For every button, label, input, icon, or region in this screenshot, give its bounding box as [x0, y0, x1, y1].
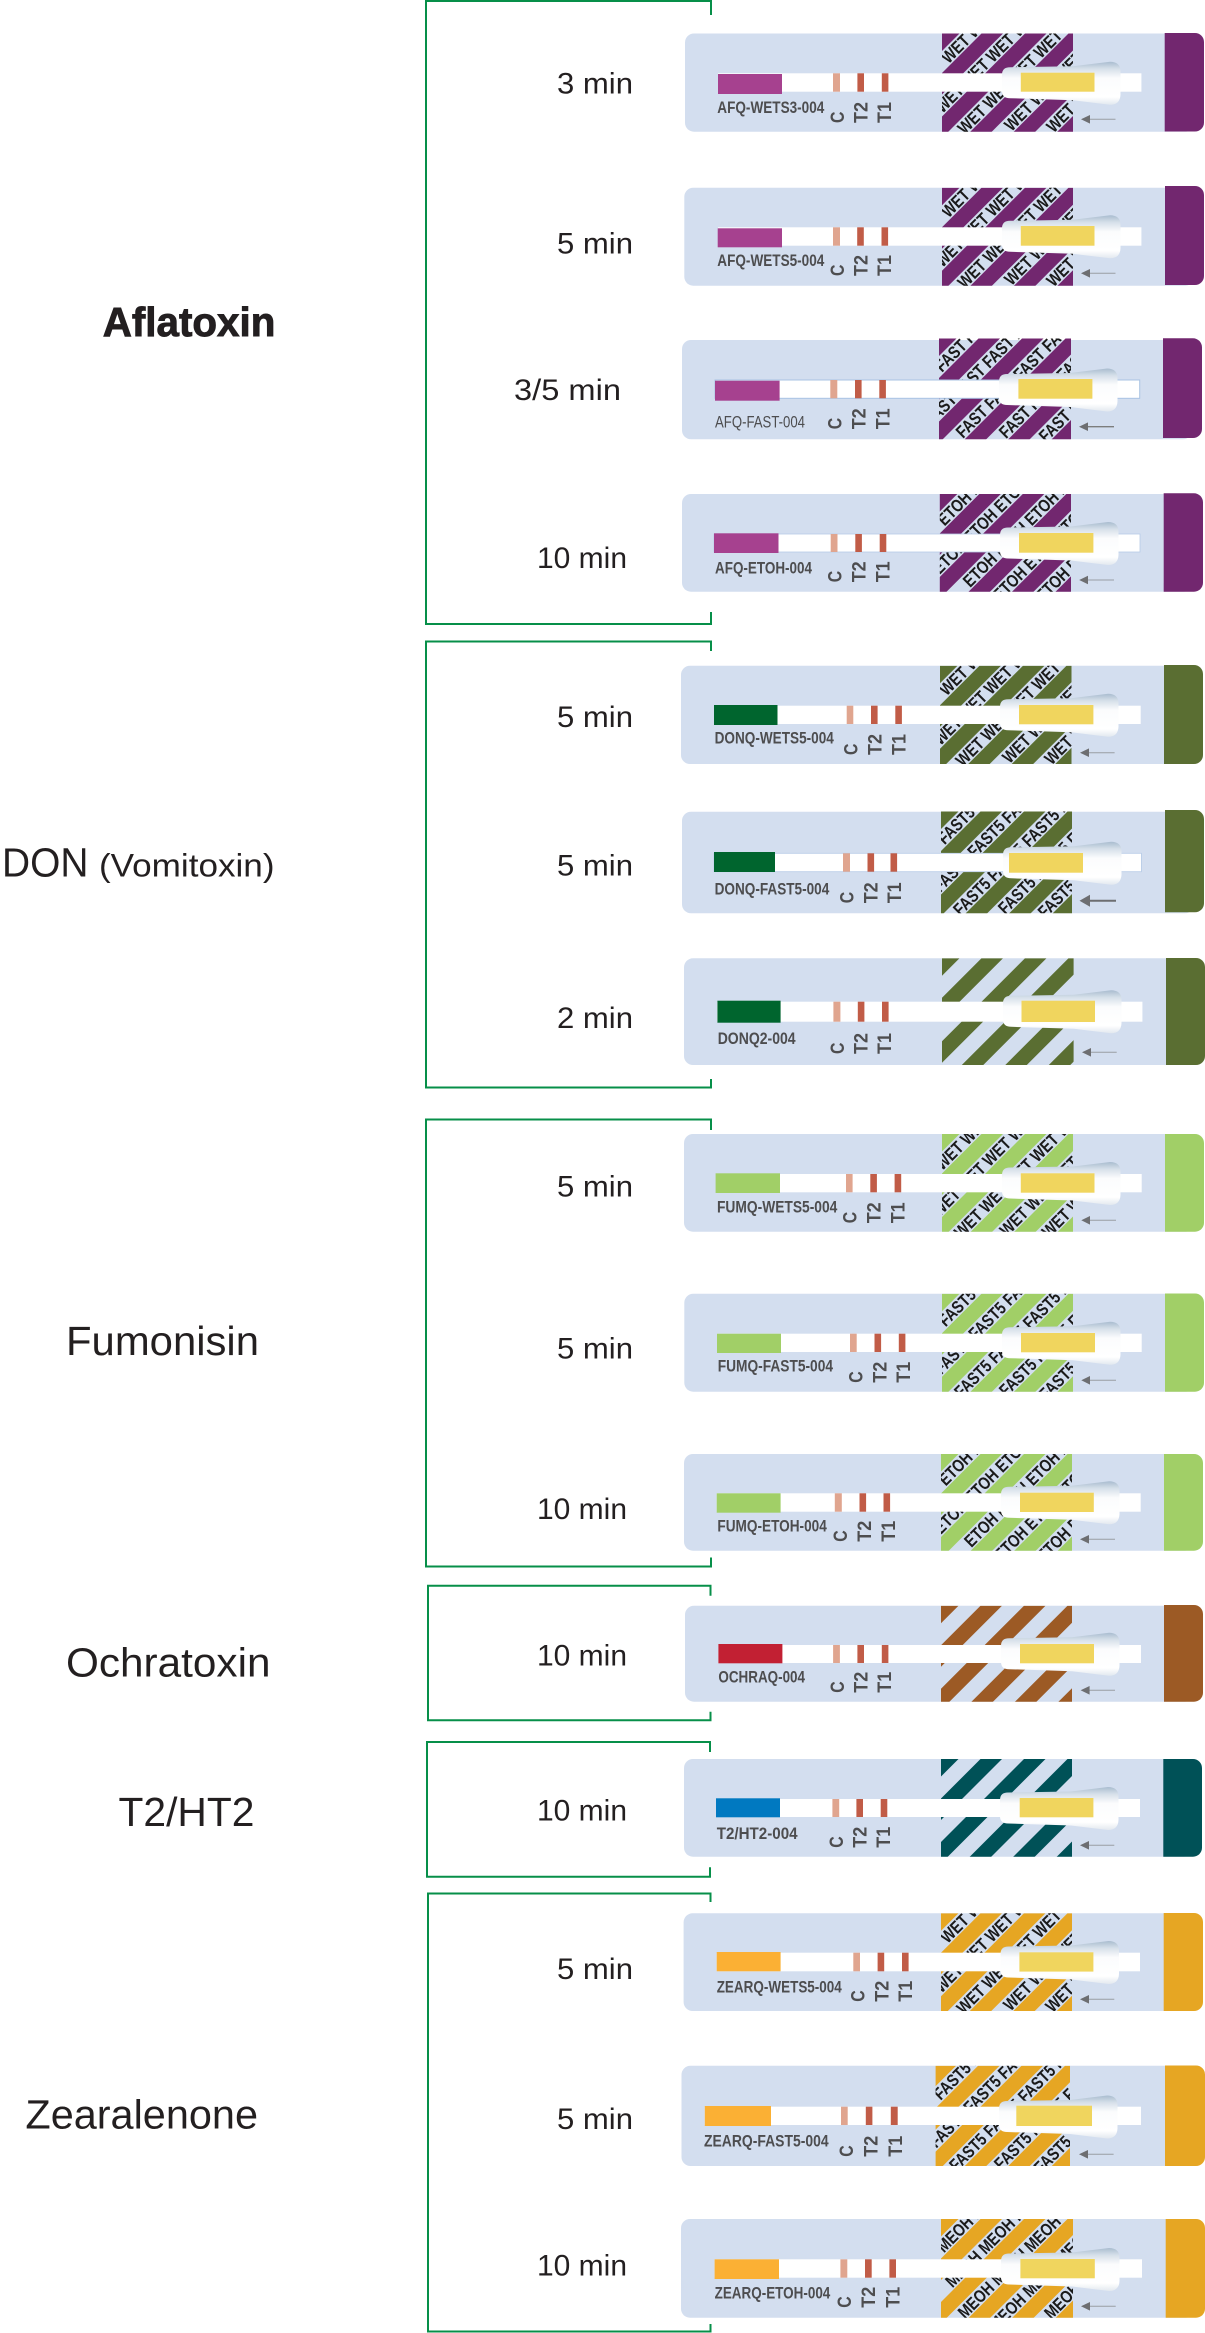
test strip: FUMQ-WETS5-004: C [840, 1212, 862, 1223]
hatch: WET: WET WET [937, 1886, 999, 1947]
product code: ZEARQ-FAST5-004 [704, 2133, 829, 2151]
test strip: FUMQ-ETOH-004 [684, 1374, 1203, 1603]
test strip: T2/HT2-004 [684, 1759, 1202, 1869]
hatch: FAST5: FAST5 FAST5 FAST5 [930, 783, 1044, 896]
time: 5 min: 5 min [557, 2103, 633, 2136]
bracket: DON [426, 642, 711, 1088]
bracket: Ochratoxin [428, 1586, 710, 1720]
hatch: WET: WET WET WET [1001, 203, 1088, 289]
hatch: ETOH: ETOH ETOH ETOH [990, 502, 1093, 605]
applicator [1001, 1633, 1120, 1676]
test strip: ZEARQ-ETOH-004: T2 [858, 2287, 880, 2308]
arrow [1079, 2150, 1114, 2159]
applicator [1000, 522, 1118, 565]
test strip: ZEARQ-WETS5-004: T1 [895, 1981, 917, 2002]
test strip: FUMQ-ETOH-004: T2 [854, 1521, 876, 1542]
hatch: FAST5: FAST5 FAST5 FAST5 [926, 2038, 1040, 2152]
end cap [1165, 2066, 1205, 2166]
test strip: DONQ-FAST5-004 [682, 728, 1204, 963]
time: 5 min: 5 min [557, 227, 633, 260]
test strip: DONQ-WETS5-004 [681, 590, 1203, 815]
arrow [1081, 115, 1116, 124]
hatch: plain stripes [941, 1606, 1072, 1702]
end cap [1164, 1454, 1203, 1551]
hatch: WET: WET WET WET WET WET [953, 633, 1090, 770]
hatch: WET: WET WET [1039, 1181, 1100, 1242]
end cap [1164, 493, 1203, 592]
applicator [1000, 1941, 1119, 1984]
hatch: WET: WET WET WET WET WET [954, 1881, 1091, 2018]
test strip: AFQ-FAST-004: T1 [872, 408, 894, 429]
sample pad [716, 1798, 780, 1817]
product code: AFQ-ETOH-004 [715, 559, 813, 577]
test strip: ZEARQ-FAST5-004 [682, 1984, 1205, 2219]
end cap [1164, 1913, 1203, 2011]
hatch: FAST5: FAST5 FAST5 [1035, 843, 1114, 922]
arrow [1082, 1048, 1117, 1057]
sample pad [718, 1644, 782, 1663]
sample pad [717, 1001, 781, 1023]
arrow [1080, 1535, 1115, 1544]
arrow [1081, 1686, 1115, 1695]
test strip: AFQ-WETS3-004 [685, 0, 1204, 182]
arrow [1080, 1995, 1114, 2004]
hatch: WET: WET WET WET WET WET [955, 155, 1092, 292]
hatch: ETOH: ETOH ETOH [1034, 1494, 1106, 1566]
hatch: FAST5: FAST5 FAST5 FAST5 FAST5 [951, 1254, 1099, 1402]
applicator [1000, 694, 1118, 737]
product code: FUMQ-FAST5-004 [718, 1358, 834, 1376]
test strip: AFQ-ETOH-004: C [824, 571, 846, 582]
test strip: OCHRAQ-004: T1 [874, 1672, 896, 1693]
test strip: ZEARQ-FAST5-004: T1 [885, 2136, 907, 2157]
hatch: FAST: FAST FAST FAST FAST [922, 304, 1047, 430]
product code: AFQ-FAST-004 [715, 414, 805, 432]
hatch: FAST5: FAST5 FAST5 FAST5 FAST5 [946, 2027, 1094, 2175]
test strip: FUMQ-FAST5-004: T1 [893, 1362, 915, 1383]
test strip: AFQ-FAST-004: C [824, 418, 846, 429]
test strip: DONQ2-004: T1 [874, 1033, 896, 1054]
hatch: WET: WET WET [938, 6, 1000, 67]
sample pad [718, 74, 782, 94]
hatch: WET: WET WET [1042, 708, 1103, 769]
hatch: MEOH: MEOH MEOH [1041, 2246, 1118, 2323]
hatch: ETOH: ETOH ETOH [934, 458, 1006, 530]
test strip: ZEARQ-WETS5-004: C [847, 1990, 869, 2002]
panel: T2/HT2 [118, 1742, 1202, 1877]
test strip: T2/HT2-004: C [826, 1836, 848, 1848]
test strip: FUMQ-FAST5-004: C [845, 1371, 867, 1383]
test strip: AFQ-WETS5-004: T1 [874, 255, 896, 276]
heading: DON (Vomitoxin): DON [2, 839, 88, 885]
hatch: FAST5: FAST5 FAST5 FAST5 [931, 1265, 1045, 1378]
applicator [999, 2096, 1118, 2138]
panel: Aflatoxin [103, 0, 1204, 643]
sample pad [717, 1493, 781, 1513]
product code: T2/HT2-004 [717, 1825, 798, 1843]
applicator [1002, 62, 1120, 105]
panel: Zearalenone [25, 1837, 1205, 2333]
hatch: FAST: FAST FAST [1036, 378, 1104, 446]
hatch: plain stripes [942, 958, 1074, 1065]
hatch: FAST5: FAST5 FAST5 [936, 1251, 1015, 1331]
hatch: WET: WET WET [1044, 230, 1105, 291]
arrow [1081, 1216, 1116, 1225]
bracket: Aflatoxin [426, 1, 711, 624]
bracket: Zearalenone [428, 1894, 710, 2332]
applicator [1002, 1322, 1120, 1365]
applicator [1001, 2248, 1120, 2291]
hatch: ETOH: ETOH ETOH [936, 1418, 1008, 1490]
arrow [1081, 1376, 1116, 1385]
sample pad [714, 852, 775, 872]
applicator [1002, 1162, 1120, 1205]
end cap [1163, 1759, 1202, 1857]
product code: FUMQ-ETOH-004 [717, 1518, 827, 1536]
heading: T2/HT2: T2/HT2 [118, 1789, 254, 1835]
sample pad [717, 1334, 781, 1353]
hatch: FAST5: FAST5 FAST5 FAST5 [991, 2060, 1105, 2174]
test strip: DONQ2-004: C [827, 1042, 849, 1054]
sample pad [715, 381, 780, 401]
product code: DONQ-WETS5-004 [715, 729, 834, 747]
hatch: FAST5: FAST5 FAST5 [1031, 2099, 1110, 2178]
test strip: DONQ-FAST5-004: T1 [884, 882, 906, 903]
test strip: FUMQ-WETS5-004: T1 [887, 1202, 909, 1223]
heading: DON (Vomitoxin): (Vomitoxin) [99, 847, 274, 883]
time: 10 min: 10 min [537, 1795, 627, 1828]
sample pad [715, 2259, 779, 2279]
hatch: MEOH: MEOH MEOH [934, 2180, 1011, 2256]
hatch: FAST5: FAST5 FAST5 [1036, 1325, 1115, 1404]
hatch: FAST5: FAST5 FAST5 FAST5 [996, 1287, 1110, 1401]
hatch: FAST: FAST FAST FAST [996, 346, 1093, 442]
hatch: WET: WET WET WET [1000, 1928, 1087, 2015]
time: 3 min: 3 min [557, 67, 633, 100]
applicator [1000, 1787, 1118, 1830]
test strip: ZEARQ-ETOH-004: T1 [882, 2287, 904, 2308]
hatch: ETOH: ETOH ETOH ETOH ETOH [961, 1418, 1095, 1551]
hatch: ETOH [930, 458, 1105, 606]
test strip: ZEARQ-FAST5-004: C [836, 2145, 858, 2157]
hatch: MEOH: MEOH MEOH MEOH MEOH [955, 2179, 1098, 2323]
test strip: AFQ-WETS3-004: C [827, 112, 849, 123]
test strip: ZEARQ-ETOH-004 [681, 2136, 1205, 2333]
hatch: WET: WET WET WET WET [931, 1885, 1043, 1997]
hatch: FAST5: FAST5 FAST5 FAST5 [995, 805, 1109, 918]
hatch: WET: WET WET WET WET [932, 5, 1044, 117]
hatch: FAST5: FAST5 FAST5 [935, 769, 1014, 848]
test strip: AFQ-WETS5-004: T2 [850, 255, 872, 276]
hatch: WET: WET WET [1044, 75, 1105, 137]
arrow [1081, 269, 1116, 278]
test strip: ZEARQ-WETS5-004 [684, 1837, 1203, 2062]
test strip: T2/HT2-004: T1 [873, 1827, 895, 1848]
hatch: WET: WET WET [938, 160, 1000, 222]
hatch: WET: WET WET WET WET [930, 637, 1042, 749]
sample pad [705, 2106, 771, 2126]
time: 10 min: 10 min [537, 1493, 627, 1526]
hatch: plain stripes [941, 1759, 1072, 1857]
arrow [1079, 576, 1114, 584]
sample pad [717, 1952, 781, 1971]
bracket: Fumonisin [426, 1120, 711, 1566]
test strip: DONQ-WETS5-004: C [840, 744, 862, 755]
time: 5 min: 5 min [557, 701, 633, 734]
product code: OCHRAQ-004 [718, 1669, 806, 1687]
test strip: OCHRAQ-004: C [827, 1681, 849, 1693]
product code: AFQ-WETS3-004 [717, 99, 825, 117]
panel: DON (Vomitoxin) [2, 590, 1205, 1088]
hatch: FAST: FAST FAST [932, 308, 1000, 376]
test strip: DONQ2-004: T2 [850, 1033, 872, 1054]
hatch: FAST5: FAST5 FAST5 [931, 2025, 1010, 2104]
time: 10 min: 10 min [537, 2250, 627, 2283]
arrow [1080, 895, 1116, 907]
product code: DONQ-FAST5-004 [715, 880, 830, 898]
hatch: MEOH: MEOH MEOH MEOH [942, 2181, 1052, 2292]
hatch: WET: WET WET [936, 638, 998, 700]
product code: FUMQ-WETS5-004 [717, 1198, 838, 1216]
hatch: ETOH: ETOH ETOH ETOH [930, 475, 1032, 578]
test strip: DONQ-FAST5-004: C [837, 892, 859, 903]
applicator [1001, 1481, 1120, 1524]
test strip: FUMQ-WETS5-004: T2 [864, 1202, 886, 1223]
hatch: FAST: FAST FAST FAST FAST [953, 317, 1078, 442]
hatch: ETOH: ETOH ETOH ETOH [931, 1435, 1034, 1538]
hatch: FAST5: FAST5 FAST5 FAST5 FAST5 [950, 772, 1098, 920]
hatch: WET: WET WET [932, 1113, 993, 1174]
test strip: AFQ-FAST-004 [682, 273, 1202, 495]
hatch: WET: WET WET WET WET [932, 159, 1044, 271]
end cap [1165, 33, 1204, 132]
test strip: AFQ-WETS3-004: T2 [850, 102, 872, 123]
time: 3/5 min: 3/5 min [514, 374, 621, 407]
hatch: ETOH: ETOH ETOH [1033, 534, 1105, 606]
sample pad [716, 1173, 780, 1193]
sample pad [718, 228, 782, 247]
product code: AFQ-WETS5-004 [717, 252, 825, 270]
applicator [1003, 842, 1122, 885]
test strip: FUMQ-FAST5-004 [684, 1210, 1204, 1445]
test strip: ZEARQ-FAST5-004: T2 [861, 2136, 883, 2157]
end cap [1165, 810, 1204, 912]
test strip: AFQ-FAST-004: T2 [848, 408, 870, 429]
heading: Zearalenone: Zearalenone [25, 2092, 258, 2138]
heading: Ochratoxin: Ochratoxin [66, 1640, 270, 1686]
test strip: FUMQ-FAST5-004: T2 [869, 1362, 891, 1383]
hatch: ETOH: ETOH ETOH ETOH ETOH [960, 458, 1094, 591]
test strip: AFQ-ETOH-004 [682, 414, 1203, 643]
time: 10 min: 10 min [537, 542, 627, 575]
end cap [1164, 1605, 1203, 1702]
time: 2 min: 2 min [557, 1002, 633, 1035]
time: 5 min: 5 min [557, 1953, 633, 1986]
test strip: FUMQ-WETS5-004 [684, 1061, 1204, 1286]
arrow [1081, 2302, 1116, 2311]
product code: ZEARQ-WETS5-004 [717, 1978, 842, 1996]
time: 10 min: 10 min [537, 1640, 627, 1673]
time: 5 min: 5 min [557, 850, 633, 883]
hatch: WET: WET WET WET [1001, 49, 1088, 135]
arrow [1079, 422, 1114, 431]
hatch: WET: WET WET WET WET WET [951, 1105, 1089, 1242]
end cap [1166, 958, 1205, 1065]
test strip: ZEARQ-WETS5-004: T2 [871, 1981, 893, 2002]
test strip: OCHRAQ-004 [685, 1605, 1203, 1716]
test strip: AFQ-WETS5-004: C [827, 264, 849, 276]
time: 5 min: 5 min [557, 1332, 633, 1365]
product code: DONQ2-004 [718, 1030, 796, 1048]
panel: Fumonisin [66, 1061, 1204, 1603]
hatch: WET: WET WET WET WET [929, 1109, 1041, 1221]
test strip: ZEARQ-ETOH-004: C [834, 2296, 856, 2308]
applicator [999, 368, 1118, 412]
test strip: AFQ-ETOH-004: T2 [848, 561, 870, 582]
hatch: WET: WET WET WET WET WET [955, 1, 1092, 138]
sample pad [714, 705, 778, 725]
arrow [1080, 748, 1115, 757]
hatch: MEOH: MEOH MEOH MEOH [987, 2224, 1097, 2333]
end cap [1165, 1294, 1204, 1392]
panel: Ochratoxin [66, 1586, 1203, 1720]
test strip: DONQ-FAST5-004: T2 [861, 882, 883, 903]
hatch: ETOH: ETOH ETOH ETOH [991, 1462, 1094, 1565]
hatch: WET: WET WET [1043, 1955, 1104, 2016]
hatch: ETOH [931, 1418, 1106, 1566]
test strip: DONQ-WETS5-004: T1 [888, 734, 910, 755]
test strip: FUMQ-ETOH-004: C [830, 1530, 852, 1542]
test strip: OCHRAQ-004: T2 [850, 1672, 872, 1693]
applicator [1002, 215, 1120, 258]
hatch: FAST [922, 304, 1104, 446]
test strip: T2/HT2-004: T2 [850, 1827, 872, 1848]
test strip: AFQ-WETS3-004: T1 [874, 102, 896, 123]
test strip: DONQ2-004 [684, 958, 1205, 1068]
test strip: DONQ-WETS5-004: T2 [864, 734, 886, 755]
end cap [1163, 338, 1202, 438]
product code: ZEARQ-ETOH-004 [715, 2284, 831, 2302]
test strip: AFQ-WETS5-004 [684, 112, 1204, 337]
test strip: FUMQ-ETOH-004: T1 [878, 1521, 900, 1542]
end cap [1165, 1134, 1204, 1232]
end cap [1165, 186, 1204, 285]
time: 5 min: 5 min [557, 1171, 633, 1204]
heading: Fumonisin: Fumonisin [66, 1318, 259, 1364]
hatch: WET: WET WET WET [997, 1154, 1083, 1240]
bracket: T2/HT2 [427, 1742, 710, 1877]
applicator [1003, 990, 1122, 1033]
end cap [1166, 2219, 1205, 2318]
sample pad [714, 533, 778, 553]
end cap [1164, 665, 1203, 764]
arrow [1080, 1841, 1114, 1850]
hatch: WET: WET WET WET [999, 681, 1086, 767]
heading: Aflatoxin: Aflatoxin [103, 299, 275, 345]
test strip: AFQ-ETOH-004: T1 [872, 561, 894, 582]
